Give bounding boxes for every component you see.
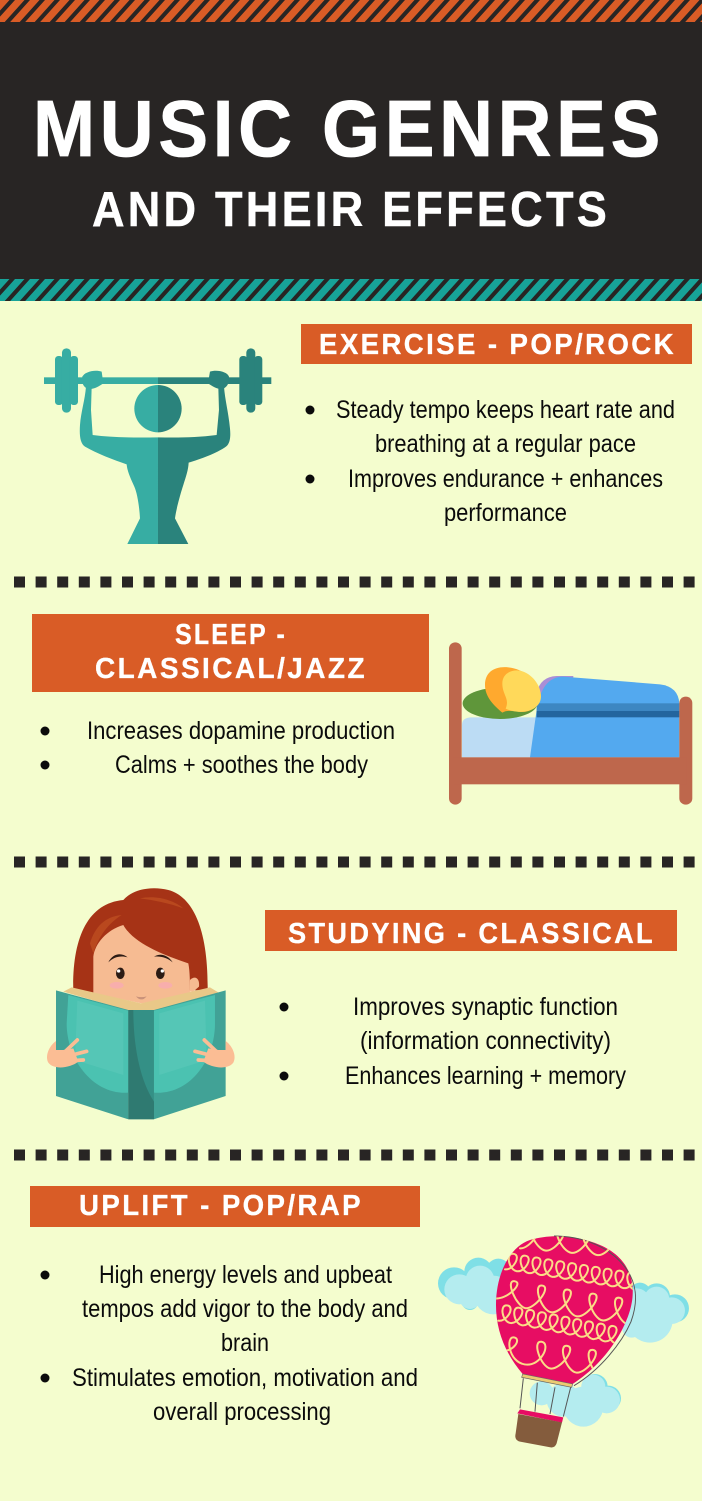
title: MUSIC GENRES xyxy=(33,84,665,173)
divider xyxy=(14,1150,702,1160)
text: uplift bullets: tempos add vigor to the body and xyxy=(82,1295,408,1323)
text: exercise bullets: Improves endurance + enhances xyxy=(348,465,663,493)
divider xyxy=(14,576,702,588)
text: uplift bullets: overall processing xyxy=(153,1398,331,1426)
text: sleep bullets: Increases dopamine production xyxy=(87,717,395,745)
text: uplift bullets xyxy=(40,1261,418,1426)
divider xyxy=(14,856,702,868)
icon: weightlifter xyxy=(44,348,271,544)
text: studying bullets: (information connectivity) xyxy=(360,1027,611,1055)
subtitle: AND THEIR EFFECTS xyxy=(92,183,610,237)
text: studying bullets xyxy=(280,993,626,1090)
text: sleep bullets: Calms + soothes the body xyxy=(115,751,368,779)
heading: sleep: CLASSICAL/JAZZ xyxy=(95,653,367,685)
header banner xyxy=(0,0,702,301)
heading: uplift xyxy=(30,1186,420,1227)
panel: exercise xyxy=(44,324,692,544)
heading: sleep: SLEEP - xyxy=(175,619,287,651)
text: sleep bullets xyxy=(40,717,395,779)
text: exercise bullets xyxy=(306,396,675,527)
icon: hot air balloon with clouds xyxy=(438,1225,689,1447)
heading: studying: STUDYING - CLASSICAL xyxy=(288,918,655,950)
icon: person in bed xyxy=(449,642,692,805)
text: uplift bullets: High energy levels and upbeat xyxy=(99,1261,392,1289)
panel: sleep xyxy=(32,614,692,805)
heading: exercise: EXERCISE - POP/ROCK xyxy=(319,329,676,361)
icon: girl reading book xyxy=(47,888,235,1119)
text: studying bullets: Enhances learning + memory xyxy=(345,1062,626,1090)
panel: uplift xyxy=(30,1186,689,1447)
heading: uplift: UPLIFT - POP/RAP xyxy=(79,1190,363,1222)
text: uplift bullets: Stimulates emotion, motivation and xyxy=(72,1364,418,1392)
text: exercise bullets: performance xyxy=(444,499,567,527)
panel: studying xyxy=(47,888,677,1119)
text: exercise bullets: breathing at a regular pace xyxy=(375,430,636,458)
heading: sleep xyxy=(32,614,429,692)
text: uplift bullets: brain xyxy=(221,1329,269,1357)
text: studying bullets: Improves synaptic function xyxy=(353,993,618,1021)
